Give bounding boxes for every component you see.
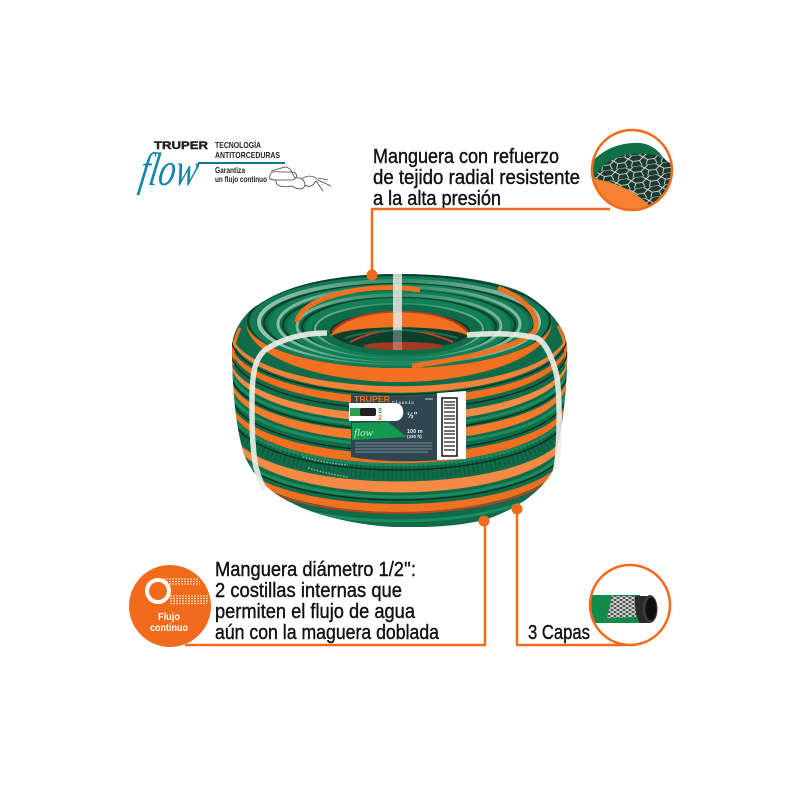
leader line: layers callout [517,509,625,645]
badge label: continuo [150,622,188,634]
leader line: diameter callout [185,521,485,645]
label hose photo panel: 2 [378,415,382,422]
label hose photo panel: 3 [378,408,382,415]
heading: radial reinforcement callout: Manguera con refuerzo [373,146,559,168]
coil red seam [276,484,544,514]
hose coil [225,270,575,530]
label size data: 100 m [407,429,423,435]
label flow mark: flow [354,427,374,439]
marker dot: top of coil [366,270,378,280]
logo: Truper Flow [136,140,331,196]
strapping tape [252,333,559,490]
vertical tape, fading inside the hole [393,330,402,350]
icon: woven reinforcement inset [590,128,674,212]
text block: hose diameter: 2 costillas internas que [215,580,402,602]
orange ring, right and front [412,288,536,366]
badge label: Flujo [158,611,180,623]
marker dot: diameter callout [478,516,490,526]
label line name: Classic [392,400,414,406]
coil weave sparkle [303,457,348,477]
label code lines [425,398,433,400]
coil weave texture [231,415,567,472]
logo script flow: flow [136,144,203,196]
label size data: ½" [407,411,418,420]
heading: radial reinforcement callout: de tejido radial resistente [373,167,580,189]
logo technology heading: TECNOLOGÍA [215,140,261,150]
coil teal highlights [231,369,567,521]
logo technology heading: ANTITORCEDURAS [215,150,280,160]
coil dark seams [231,338,567,500]
flow ring [147,580,169,602]
coil centre hole [330,312,470,350]
infographic canvas [129,128,674,647]
leader line: top callout to hose [372,209,610,275]
coil outer edge orange [233,326,566,365]
logo tagline: Garantiza [215,166,245,175]
coil top surface [246,274,552,368]
coil base [225,270,575,530]
marker dot: layers callout [512,504,522,514]
coil front orange winding [246,314,552,382]
heading: radial reinforcement callout: a la alta presión [373,188,501,210]
coil orange windings [231,331,567,512]
label brand: TRUPER [354,394,390,404]
icon badge: flujo continuo [129,565,211,647]
hose band hatch [163,579,208,604]
text block: hose diameter: permiten el flujo de agua [215,601,416,623]
vertical tape [393,274,402,330]
label barcode [437,391,466,460]
logo tagline: un flujo continuo [215,175,267,184]
label fine print [355,443,432,452]
text block: hose diameter: Manguera diámetro 1/2'': [215,559,416,581]
label green band [352,422,407,440]
text block: hose diameter: aún con la maguera doblada [215,622,440,644]
logo wordmark TRUPER: TRUPER [154,140,208,152]
icon: hand bending a hose [269,167,331,191]
label size data: (330 ft) [407,434,422,439]
text: 3 capas: 3 Capas [528,622,590,644]
logo underline [198,162,285,164]
icon: three layer hose inset [588,565,670,645]
orange ring, back left [297,288,420,322]
product label [349,391,466,461]
label hose photo panel [349,403,403,422]
